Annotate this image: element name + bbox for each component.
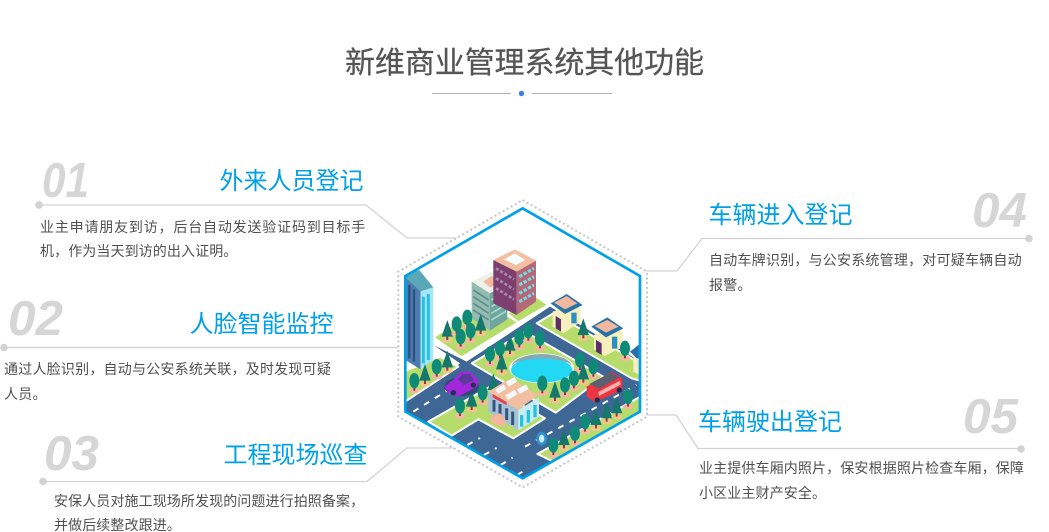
text 01 bbox=[40, 219, 366, 259]
title divider bbox=[432, 91, 612, 96]
number 01: 01 bbox=[42, 154, 89, 208]
number 05: 05 bbox=[963, 390, 1019, 444]
central hexagon city illustration bbox=[398, 200, 647, 487]
panel: 02 face monitoring bbox=[0, 292, 398, 402]
panel: 03 site patrol bbox=[39, 427, 458, 532]
panel: 05 vehicle exit bbox=[647, 390, 1025, 501]
title: 新维商业管理系统其他功能 bbox=[345, 47, 704, 80]
connector 03 bbox=[39, 448, 458, 485]
text 02: 人员。 bbox=[4, 386, 47, 402]
text 05 bbox=[699, 460, 1024, 501]
connector 01 bbox=[35, 201, 460, 238]
text 03 bbox=[54, 493, 364, 532]
connector 02 bbox=[0, 344, 398, 351]
heading 02: 人脸智能监控 bbox=[190, 311, 334, 338]
purple car bbox=[444, 372, 479, 397]
dotted outer hexagon bbox=[398, 200, 647, 487]
connector 04 bbox=[646, 235, 1033, 271]
grass blocks bbox=[403, 297, 643, 462]
heading 01: 外来人员登记 bbox=[220, 168, 364, 195]
heading 03: 工程现场巡查 bbox=[224, 442, 368, 469]
panel: 01 visitor registration bbox=[35, 154, 460, 259]
houses bbox=[551, 294, 643, 377]
text 02: 通过人脸识别，自动与公安系统关联，及时发现可疑 bbox=[4, 361, 331, 377]
text 02 bbox=[4, 361, 331, 402]
shop building bbox=[488, 378, 539, 431]
location pin bbox=[536, 432, 547, 446]
number 02: 02 bbox=[8, 292, 63, 346]
red bus bbox=[587, 372, 622, 403]
heading 05: 车辆驶出登记 bbox=[698, 409, 842, 436]
text 04: 报警。 bbox=[709, 277, 752, 293]
trees bbox=[409, 310, 633, 458]
city scene bbox=[403, 249, 643, 478]
text 05: 小区业主财产安全。 bbox=[699, 485, 826, 501]
number 03: 03 bbox=[44, 427, 99, 481]
text 01: 业主申请朋友到访，后台自动发送验证码到目标手 bbox=[40, 219, 366, 235]
blue hexagon frame bbox=[405, 208, 640, 478]
pond bbox=[509, 353, 574, 383]
roads bbox=[403, 307, 643, 478]
heading 04: 车辆进入登记 bbox=[708, 202, 852, 229]
text 01: 机，作为当天到访的出入证明。 bbox=[40, 243, 237, 259]
number 04: 04 bbox=[972, 184, 1027, 238]
connector 05 bbox=[647, 415, 1025, 453]
pink tower bbox=[493, 249, 536, 315]
text 04 bbox=[709, 252, 1022, 293]
green tower bbox=[472, 272, 507, 331]
road dashes bbox=[413, 385, 637, 475]
panel: 04 vehicle entry bbox=[646, 184, 1033, 293]
text 04: 自动车牌识别，与公安系统管理，对可疑车辆自动 bbox=[709, 252, 1022, 268]
text 03: 安保人员对施工现场所发现的问题进行拍照备案， bbox=[54, 493, 364, 509]
text 05: 业主提供车厢内照片，保安根据照片检查车厢，保障 bbox=[699, 460, 1024, 476]
blue tower bbox=[405, 270, 433, 369]
